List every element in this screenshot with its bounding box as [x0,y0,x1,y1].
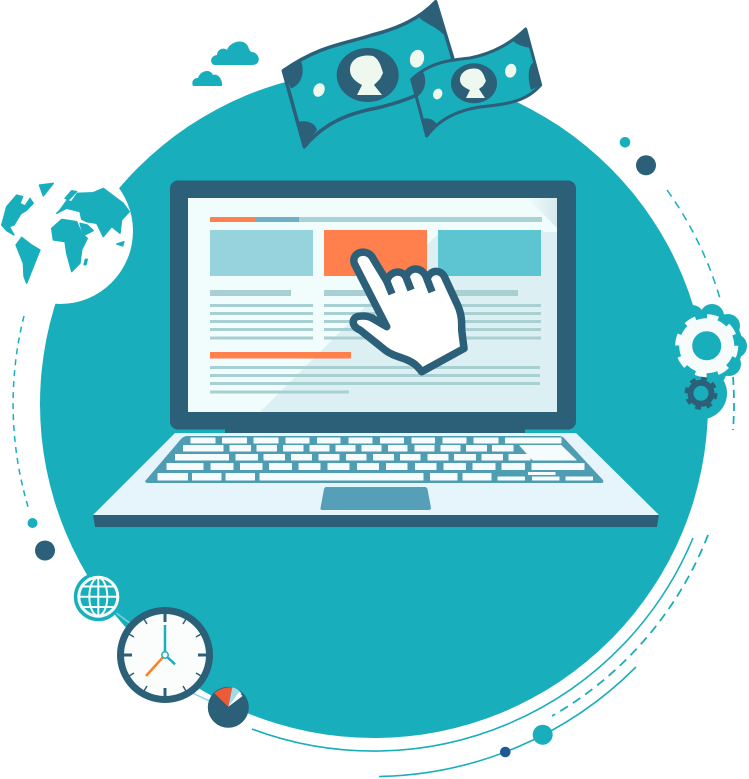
laptop screen bezel [170,180,576,430]
orange call-to-action box [324,230,427,276]
keyboard well [145,436,603,483]
icon: clock [120,610,210,700]
small dark gear [686,379,716,408]
laptop hinge [225,428,525,434]
icon: world map globe [0,158,133,304]
clock hands [146,625,175,676]
icon: large banknote [283,2,453,147]
icon: pointing hand cursor [353,252,464,372]
keyboard keys [158,438,592,480]
gear scalloped backing [671,304,747,419]
laptop base deck [93,433,659,515]
large white gear [679,318,735,374]
icon: web globe badge [74,572,123,621]
light blue content box [210,230,313,276]
connector lines between small icons [115,612,214,703]
web page top bar [210,217,542,222]
teal content box [438,230,541,276]
icon: small banknote [412,29,541,136]
decorative dots [28,137,656,757]
clock hour marks [124,614,206,696]
laptop [93,180,659,527]
orange heading bar [210,352,351,358]
orbit lines [13,190,734,776]
icon: gear cluster [671,304,747,419]
large teal background circle [40,70,708,738]
icon: pie chart [208,687,249,728]
icon: clouds [192,42,259,86]
screen display [188,198,557,412]
column text lines [210,290,541,340]
trackpad [320,487,431,510]
lower text lines [210,366,540,394]
laptop front edge [93,515,659,527]
